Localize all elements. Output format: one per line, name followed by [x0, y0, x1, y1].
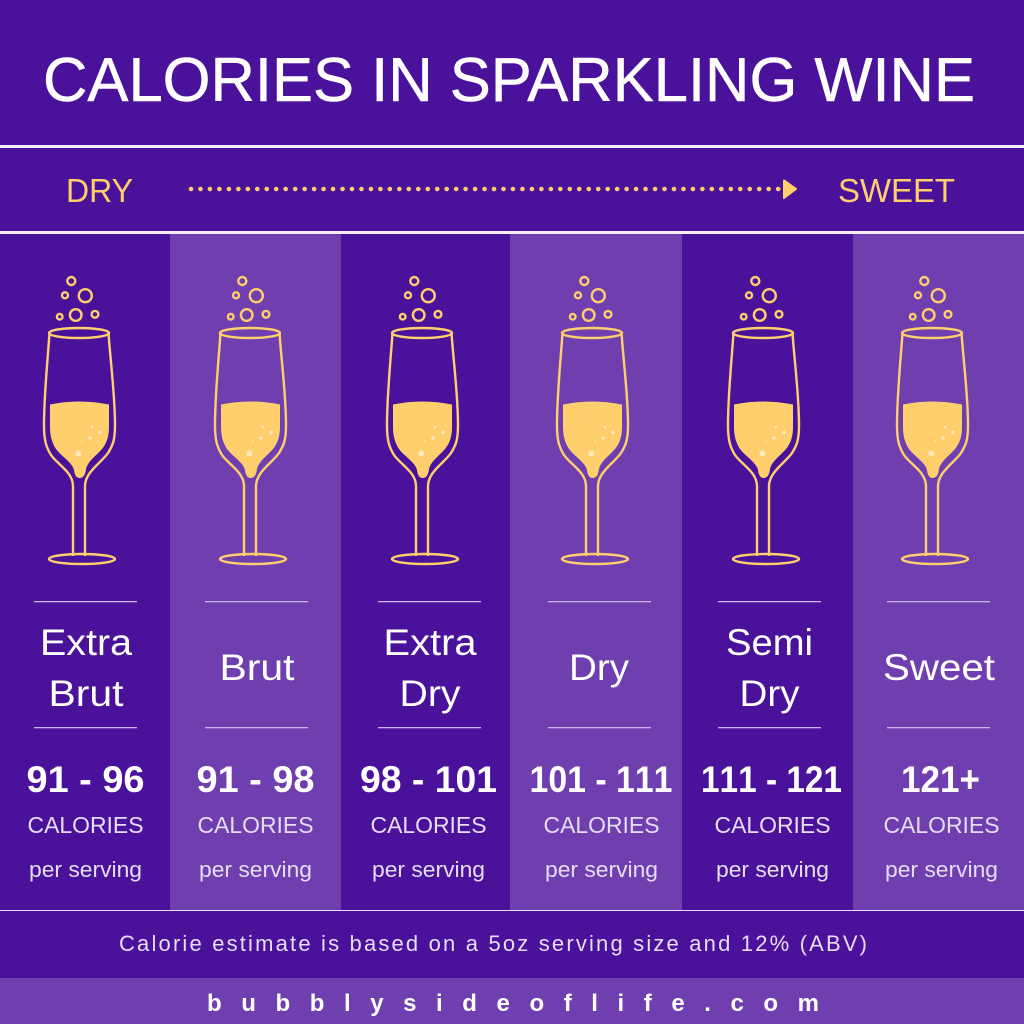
calories value: 121+: [901, 759, 980, 800]
scale: dry to sweet: [66, 173, 955, 210]
column: Extra Brut: [0, 234, 170, 910]
arrow: dotted dry to sweet: [191, 180, 796, 198]
website footer: bubblysideoflife.com: [207, 990, 819, 1017]
name: Sweet: [883, 647, 996, 688]
calories label: CALORIES: [884, 812, 1000, 838]
per serving: per serving: [372, 857, 485, 882]
website footer: [0, 978, 1024, 1024]
name: Dry: [400, 673, 461, 714]
column: Sweet: [853, 234, 1024, 910]
column: Brut: [170, 234, 341, 910]
icon: champagne glass: [215, 277, 286, 564]
icon: champagne glass: [44, 277, 115, 564]
label: dry: DRY: [66, 173, 133, 210]
name: [40, 622, 132, 714]
calories value: 101 - 111: [530, 759, 672, 800]
column: Extra Dry: [341, 234, 510, 910]
calories value: 91 - 98: [196, 759, 314, 800]
title: CALORIES IN SPARKLING WINE: [43, 45, 975, 115]
name: Semi: [726, 622, 813, 663]
label: sweet: SWEET: [838, 173, 955, 210]
per serving: per serving: [885, 857, 998, 882]
icon: champagne glass: [728, 277, 799, 564]
name: Brut: [220, 647, 295, 688]
icon: champagne glass: [557, 277, 628, 564]
name: Extra: [40, 622, 132, 663]
per serving: per serving: [29, 857, 142, 882]
calories value: 111 - 121: [701, 759, 842, 800]
column: Semi Dry: [682, 234, 853, 910]
calories label: CALORIES: [544, 812, 660, 838]
calories value: 91 - 96: [26, 759, 144, 800]
name: Brut: [48, 673, 124, 714]
name: Extra: [384, 622, 477, 663]
calories label: CALORIES: [370, 812, 486, 838]
column: Dry: [510, 234, 682, 910]
per serving: per serving: [716, 857, 829, 882]
per serving: per serving: [199, 857, 312, 882]
calories label: CALORIES: [714, 812, 830, 838]
icon: champagne glass: [387, 277, 458, 564]
calories value: 98 - 101: [360, 759, 497, 800]
per serving: per serving: [545, 857, 658, 882]
name: [384, 622, 477, 714]
icon: champagne glass: [897, 277, 968, 564]
calories label: CALORIES: [198, 812, 314, 838]
footnote: Calorie estimate is based on a 5oz serving size and 12% (ABV): [119, 931, 867, 956]
calories label: CALORIES: [28, 812, 144, 838]
name: [726, 622, 813, 714]
name: Dry: [569, 647, 630, 688]
name: Dry: [740, 673, 800, 714]
